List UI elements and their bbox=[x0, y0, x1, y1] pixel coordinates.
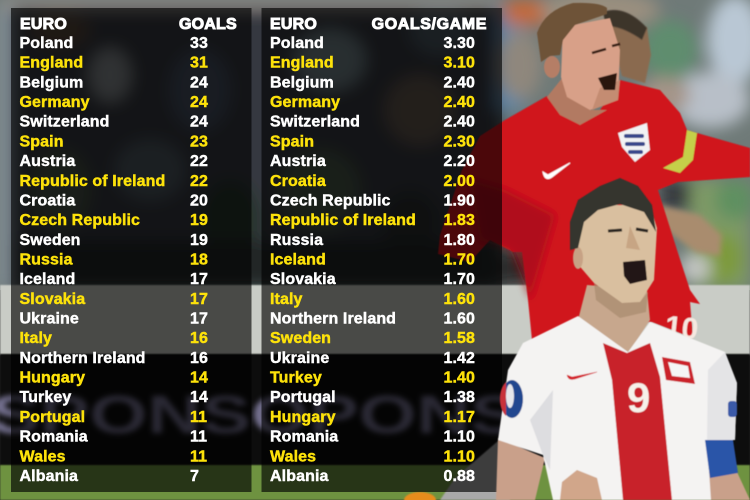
row: Germany: 2.40 bbox=[443, 94, 475, 111]
row: Sweden: Sweden bbox=[270, 330, 331, 347]
nose bbox=[626, 226, 640, 250]
row: Turkey: Turkey bbox=[270, 370, 322, 387]
row: Albania: Albania bbox=[20, 468, 78, 485]
row: Switzerland: Switzerland bbox=[270, 114, 360, 131]
row: England: 31 bbox=[190, 55, 208, 72]
row: Albania: Albania bbox=[270, 468, 328, 485]
row: Switzerland bbox=[20, 114, 208, 131]
hair bbox=[537, 3, 607, 62]
row: Spain: 23 bbox=[190, 133, 208, 150]
row: Poland: 33 bbox=[190, 35, 208, 52]
row: Wales: Wales bbox=[270, 448, 316, 465]
header row: GOALS bbox=[179, 16, 237, 33]
panel: goals per game table background bbox=[262, 8, 502, 492]
England crest bbox=[618, 123, 650, 162]
row: Russia bbox=[270, 232, 475, 249]
row: Italy bbox=[20, 330, 208, 347]
background: blurred arm of distant player bbox=[660, 205, 722, 256]
row: Ukraine: Ukraine bbox=[270, 350, 329, 367]
row: Republic of Ireland: Republic of Ireland bbox=[20, 173, 165, 190]
row: Poland: Poland bbox=[20, 35, 73, 52]
player: England captain in red shirt bbox=[438, 3, 750, 346]
row: England: 3.10 bbox=[443, 55, 475, 72]
row: Czech Republic bbox=[20, 212, 208, 229]
row: Spain: Spain bbox=[20, 133, 64, 150]
row: Austria: Austria bbox=[20, 153, 75, 170]
row: Romania bbox=[20, 429, 207, 446]
row: Portugal bbox=[20, 409, 207, 426]
row: Belgium bbox=[270, 74, 475, 91]
shirt shading bbox=[707, 352, 737, 440]
row: Romania bbox=[270, 429, 475, 446]
row: Germany: 24 bbox=[190, 94, 208, 111]
neck bbox=[547, 77, 607, 125]
row: Northern Ireland: Northern Ireland bbox=[270, 310, 396, 328]
row: Switzerland bbox=[270, 114, 475, 131]
panel: goals table background bbox=[11, 8, 252, 492]
row: Austria: 22 bbox=[190, 153, 208, 170]
row: Italy: 16 bbox=[190, 330, 208, 347]
row: Wales: 1.10 bbox=[443, 448, 475, 465]
row: Czech Republic: 1.90 bbox=[443, 192, 475, 209]
row: Russia: 18 bbox=[190, 252, 208, 268]
row: Poland: Poland bbox=[270, 35, 324, 52]
background: pitch bbox=[0, 465, 750, 500]
row: England bbox=[20, 55, 208, 72]
row: Croatia: 20 bbox=[190, 192, 208, 209]
open mouth bbox=[598, 73, 617, 90]
row: Croatia bbox=[20, 192, 208, 209]
row: Hungary: Hungary bbox=[270, 409, 336, 426]
red stripe bbox=[603, 343, 672, 500]
row: Sweden bbox=[20, 232, 208, 249]
row: Wales: Wales bbox=[20, 448, 66, 465]
row: Poland bbox=[270, 35, 475, 52]
arms bbox=[496, 438, 545, 500]
row: Russia bbox=[20, 252, 208, 268]
row: Turkey: 1.40 bbox=[443, 370, 475, 387]
row: Italy: Italy bbox=[20, 330, 52, 347]
ear bbox=[573, 247, 583, 269]
background: dark sponsor board bbox=[0, 354, 750, 467]
row: Austria: 2.20 bbox=[443, 153, 475, 170]
row: Iceland bbox=[270, 252, 475, 268]
row: Hungary: Hungary bbox=[20, 370, 85, 387]
row: Italy: 1.60 bbox=[443, 291, 475, 308]
row: Northern Ireland: 16 bbox=[190, 350, 208, 367]
row: Croatia: 2.00 bbox=[443, 173, 475, 190]
face bbox=[561, 18, 620, 110]
row: Albania: 7 bbox=[190, 468, 199, 485]
row: Ukraine bbox=[270, 350, 475, 367]
open mouth bbox=[623, 260, 647, 284]
row: Slovakia: Slovakia bbox=[270, 271, 336, 288]
row: Czech Republic bbox=[270, 192, 475, 209]
row: Slovakia: 17 bbox=[190, 291, 208, 308]
row: Slovakia: Slovakia bbox=[20, 291, 85, 308]
row: Republic of Ireland: 22 bbox=[190, 173, 208, 190]
ear bbox=[544, 56, 560, 78]
hair bbox=[570, 178, 656, 250]
row: Italy: Italy bbox=[270, 291, 303, 308]
header row: GOALS/GAME bbox=[372, 16, 487, 33]
row: Slovakia: 1.70 bbox=[443, 271, 475, 288]
row: Iceland: 17 bbox=[190, 271, 208, 288]
eagle crest bbox=[662, 357, 695, 384]
neck shadow bbox=[594, 283, 648, 318]
row: Slovakia bbox=[20, 291, 208, 308]
row: Belgium: 2.40 bbox=[443, 74, 475, 91]
row: Northern Ireland: Northern Ireland bbox=[20, 350, 146, 367]
row: Austria bbox=[270, 153, 475, 170]
shirt shading bbox=[470, 180, 555, 300]
row: Croatia bbox=[270, 173, 475, 190]
row: Germany: Germany bbox=[20, 94, 90, 111]
row: Czech Republic: Czech Republic bbox=[20, 212, 140, 229]
row: Czech Republic: Czech Republic bbox=[270, 192, 391, 209]
swoosh bbox=[567, 372, 597, 380]
row: Belgium: Belgium bbox=[20, 74, 83, 91]
row: Romania: 11 bbox=[190, 429, 207, 446]
row: Northern Ireland: 1.60 bbox=[443, 310, 475, 328]
row: Spain: 2.30 bbox=[443, 133, 475, 150]
row: Russia: 1.80 bbox=[443, 232, 475, 249]
eyes bbox=[592, 44, 620, 53]
sleeve badge bbox=[728, 401, 737, 417]
row: Romania: Romania bbox=[20, 429, 88, 446]
fist bbox=[560, 470, 602, 500]
background: advertising board bbox=[0, 285, 750, 355]
row: Iceland bbox=[20, 271, 208, 288]
row: Wales: 11 bbox=[190, 448, 207, 465]
row: Germany: Germany bbox=[270, 94, 340, 111]
row: Hungary: 14 bbox=[190, 370, 208, 387]
row: Germany bbox=[20, 94, 208, 111]
row: Belgium bbox=[20, 74, 208, 91]
row: Portugal bbox=[270, 389, 475, 406]
row: Hungary: 1.17 bbox=[443, 409, 475, 426]
row: Switzerland: 2.40 bbox=[443, 114, 475, 131]
player: Poland striker in white shirt bbox=[496, 178, 750, 500]
player behind: teammate head bbox=[603, 10, 651, 83]
row: Sweden bbox=[270, 330, 475, 347]
row: Croatia: Croatia bbox=[20, 192, 75, 209]
background: blurred sponsor lettering: SPONSOPONS bbox=[0, 385, 520, 445]
row: Ukraine bbox=[20, 310, 208, 328]
row: Romania: 1.10 bbox=[443, 429, 475, 446]
row: Iceland: Iceland bbox=[20, 271, 75, 288]
row: Spain bbox=[270, 133, 475, 150]
row: Russia: Russia bbox=[270, 232, 323, 249]
eyes bbox=[608, 229, 648, 231]
shirt number: 9 bbox=[627, 374, 650, 421]
row: Ukraine: 17 bbox=[190, 310, 208, 328]
row: Hungary bbox=[20, 370, 208, 387]
captain armband bbox=[663, 130, 697, 173]
row: Belgium: 24 bbox=[190, 74, 208, 91]
shirt number: 10 bbox=[663, 310, 700, 346]
row: Slovakia bbox=[270, 271, 475, 288]
row: Republic of Ireland: Republic of Ireland bbox=[270, 212, 416, 229]
row: Italy bbox=[270, 291, 475, 308]
goals table bbox=[20, 16, 237, 485]
header row: EURO bbox=[270, 16, 317, 33]
row: Iceland: 1.70 bbox=[443, 252, 475, 268]
row: Portugal: 11 bbox=[190, 409, 207, 426]
row: Wales bbox=[20, 448, 207, 465]
row: Turkey bbox=[20, 389, 208, 406]
goals per game table bbox=[270, 16, 487, 485]
row: Northern Ireland bbox=[20, 350, 208, 367]
row: Belgium: Belgium bbox=[270, 74, 334, 91]
header row bbox=[20, 16, 237, 33]
row: Republic of Ireland: 1.83 bbox=[443, 212, 475, 229]
row: Poland bbox=[20, 35, 208, 52]
red shirt bbox=[438, 80, 750, 340]
row: Portugal: 1.38 bbox=[443, 389, 475, 406]
row: Germany bbox=[270, 94, 475, 111]
row: Albania: 0.88 bbox=[443, 468, 475, 485]
blue armband bbox=[705, 440, 738, 478]
row: Austria bbox=[20, 153, 208, 170]
row: Portugal: Portugal bbox=[20, 409, 85, 426]
row: Turkey: Turkey bbox=[20, 389, 71, 406]
row: Sweden: 1.58 bbox=[443, 330, 475, 347]
Euro tournament badge bbox=[500, 380, 523, 418]
row: Sweden: 19 bbox=[190, 232, 208, 249]
row: England: England bbox=[20, 55, 83, 72]
header row: EURO bbox=[20, 16, 67, 33]
row: Spain bbox=[20, 133, 208, 150]
row: Turkey: 14 bbox=[190, 389, 208, 406]
row: Romania: Romania bbox=[270, 429, 338, 446]
row: Turkey bbox=[270, 370, 475, 387]
row: Portugal: Portugal bbox=[270, 389, 336, 406]
row: England: England bbox=[270, 55, 334, 72]
row: Sweden: Sweden bbox=[20, 232, 81, 249]
row: Iceland: Iceland bbox=[270, 252, 326, 268]
row: Hungary bbox=[270, 409, 475, 426]
row: Austria: Austria bbox=[270, 153, 326, 170]
row: Poland: 3.30 bbox=[443, 35, 475, 52]
row: England bbox=[270, 55, 475, 72]
row: Ukraine: 1.42 bbox=[443, 350, 475, 367]
crest lions bbox=[624, 134, 645, 154]
row: Ukraine: Ukraine bbox=[20, 310, 79, 328]
row: Northern Ireland bbox=[270, 310, 475, 328]
row: Albania bbox=[270, 468, 475, 485]
neck bbox=[578, 285, 650, 355]
row: Czech Republic: 19 bbox=[190, 212, 208, 229]
white shirt bbox=[498, 316, 737, 500]
row: Switzerland: Switzerland bbox=[20, 114, 110, 131]
row: Switzerland: 24 bbox=[190, 114, 208, 131]
row: Albania bbox=[20, 468, 199, 485]
row: Spain: Spain bbox=[270, 133, 314, 150]
background: grey figure and ball bbox=[440, 435, 510, 500]
header row bbox=[270, 16, 487, 33]
swoosh bbox=[543, 163, 570, 179]
row: Croatia: Croatia bbox=[270, 173, 326, 190]
face bbox=[574, 205, 657, 303]
row: Wales bbox=[270, 448, 475, 465]
row: Russia: Russia bbox=[20, 252, 73, 268]
